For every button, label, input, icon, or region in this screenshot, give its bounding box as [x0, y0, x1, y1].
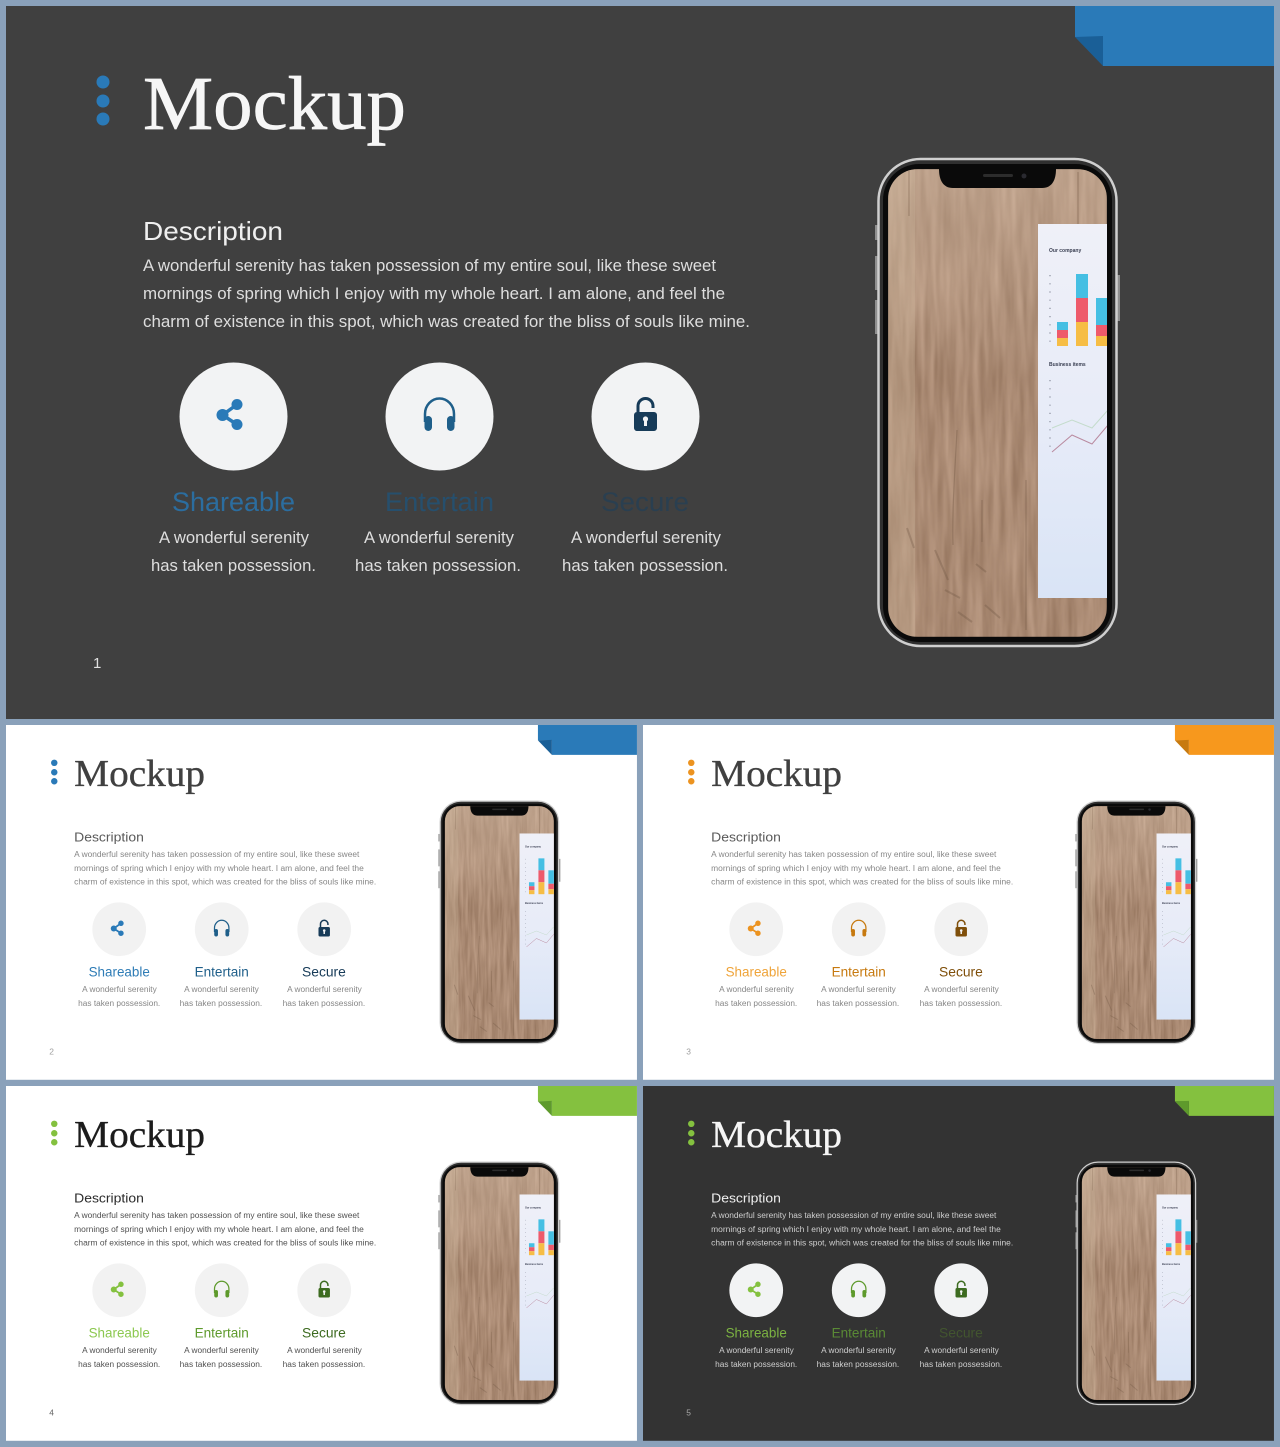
feature: shareable: Shareable [89, 1325, 150, 1340]
feature: entertain: A wonderful serenity [364, 529, 515, 547]
feature: entertain: A wonderful serenity [821, 985, 897, 994]
page number: 2 [49, 1046, 54, 1056]
panel: slide 3 white orange [643, 725, 1274, 1080]
feature: secure: has taken possession. [283, 999, 365, 1008]
feature: entertain: has taken possession. [180, 1360, 262, 1369]
text block: description body: charm of existence in this spot, which was created for the bliss of souls like mine. [143, 313, 750, 331]
feature: secure [920, 1263, 1002, 1369]
feature: secure: Secure [939, 964, 983, 979]
feature: secure: A wonderful serenity [287, 985, 363, 994]
panel: slide 5 dark green [643, 1086, 1274, 1441]
page number: 3 [686, 1046, 691, 1056]
feature: secure: Secure [601, 487, 689, 517]
panel: slide 2 white blue [6, 725, 637, 1080]
feature: secure: A wonderful serenity [924, 1346, 1000, 1355]
feature: shareable [715, 1263, 797, 1369]
feature: entertain [180, 902, 262, 1008]
feature: entertain [817, 902, 899, 1008]
feature: entertain [817, 1263, 899, 1369]
feature: shareable: Shareable [726, 964, 787, 979]
feature: secure: Secure [302, 1325, 346, 1340]
corner ribbon [1075, 6, 1274, 66]
phone mockup [438, 801, 560, 1043]
text block: description body: mornings of spring which I enjoy with my whole heart. I am alone, and feel the [711, 864, 1001, 873]
icon: title dots [51, 760, 58, 784]
feature: shareable [151, 362, 316, 575]
feature: entertain: A wonderful serenity [184, 1346, 260, 1355]
phone mockup [1075, 801, 1197, 1043]
icon: title dots [688, 760, 695, 784]
feature: entertain: Entertain [832, 1325, 886, 1340]
feature: shareable: A wonderful serenity [159, 529, 310, 547]
feature: secure: A wonderful serenity [287, 1346, 363, 1355]
feature: secure: A wonderful serenity [571, 529, 722, 547]
icon: title dots [51, 1121, 58, 1145]
page number: 5 [686, 1407, 691, 1417]
feature: secure: has taken possession. [562, 557, 728, 575]
feature: secure: Secure [939, 1325, 983, 1340]
feature: shareable [78, 1263, 160, 1369]
text block: description body: A wonderful serenity has taken possession of my entire soul, like these sweet [711, 1211, 997, 1220]
text block: description body: mornings of spring which I enjoy with my whole heart. I am alone, and feel the [711, 1225, 1001, 1234]
heading: description: Description [711, 1190, 781, 1205]
slide background [6, 1086, 637, 1441]
text block: description body: A wonderful serenity has taken possession of my entire soul, like these sweet [711, 850, 997, 859]
title: Mockup [74, 753, 205, 795]
feature: shareable: A wonderful serenity [719, 985, 795, 994]
corner ribbon [538, 1086, 637, 1116]
feature: entertain [180, 1263, 262, 1369]
text block: description body: charm of existence in this spot, which was created for the bliss of souls like mine. [74, 1239, 376, 1248]
feature: entertain: has taken possession. [180, 999, 262, 1008]
text block: description body: mornings of spring which I enjoy with my whole heart. I am alone, and feel the [143, 285, 725, 303]
text block: description body: charm of existence in this spot, which was created for the bliss of souls like mine. [711, 1239, 1013, 1248]
heading: description: Description [74, 829, 144, 844]
feature: shareable: A wonderful serenity [82, 985, 158, 994]
feature: entertain: has taken possession. [817, 1360, 899, 1369]
feature: secure [920, 902, 1002, 1008]
slide background [643, 1086, 1274, 1441]
phone mockup [438, 1162, 560, 1404]
text block: description body: mornings of spring which I enjoy with my whole heart. I am alone, and feel the [74, 864, 364, 873]
feature: entertain: Entertain [385, 487, 494, 517]
page number: 4 [49, 1407, 54, 1417]
feature: secure [562, 362, 728, 575]
text block: description body [74, 1211, 376, 1248]
feature: shareable [78, 902, 160, 1008]
feature: secure: has taken possession. [283, 1360, 365, 1369]
title: Mockup [74, 1114, 205, 1156]
feature: shareable: A wonderful serenity [82, 1346, 158, 1355]
feature: entertain: Entertain [832, 964, 886, 979]
feature: entertain: has taken possession. [355, 557, 521, 575]
feature: secure: has taken possession. [920, 999, 1002, 1008]
text block: description body: mornings of spring which I enjoy with my whole heart. I am alone, and feel the [74, 1225, 364, 1234]
feature: shareable: has taken possession. [78, 1360, 160, 1369]
text block: description body: charm of existence in this spot, which was created for the bliss of souls like mine. [711, 878, 1013, 887]
page number: 1 [93, 655, 101, 672]
panel: slide 4 white green [6, 1086, 637, 1441]
text block: description body [143, 257, 750, 331]
icon: title dots [96, 76, 110, 126]
feature: shareable [715, 902, 797, 1008]
corner ribbon [538, 725, 637, 755]
feature: secure [283, 902, 365, 1008]
feature: secure [283, 1263, 365, 1369]
feature: shareable: has taken possession. [715, 1360, 797, 1369]
heading: description: Description [143, 216, 283, 246]
feature: shareable: A wonderful serenity [719, 1346, 795, 1355]
feature: shareable: has taken possession. [715, 999, 797, 1008]
corner ribbon [1175, 1086, 1274, 1116]
text block: description body: charm of existence in this spot, which was created for the bliss of souls like mine. [74, 878, 376, 887]
phone mockup [875, 159, 1120, 646]
slide background [643, 725, 1274, 1080]
feature: shareable: has taken possession. [151, 557, 316, 575]
title: Mockup [711, 1114, 842, 1156]
heading: description: Description [711, 829, 781, 844]
feature: shareable: Shareable [172, 487, 295, 517]
text block: description body [711, 1211, 1013, 1248]
title: Mockup [711, 753, 842, 795]
phone mockup [1075, 1162, 1197, 1404]
feature: entertain: has taken possession. [817, 999, 899, 1008]
corner ribbon [1175, 725, 1274, 755]
slide background [6, 725, 637, 1080]
slide background [6, 6, 1274, 719]
text block: description body [74, 850, 376, 887]
text block: description body: A wonderful serenity has taken possession of my entire soul, like these sweet [74, 850, 360, 859]
icon: title dots [688, 1121, 695, 1145]
text block: description body: A wonderful serenity has taken possession of my entire soul, like these sweet [143, 257, 716, 275]
panel: slide 1 large dark blue [6, 6, 1274, 719]
feature: shareable: Shareable [89, 964, 150, 979]
feature: entertain: A wonderful serenity [184, 985, 260, 994]
title: Mockup [143, 62, 406, 146]
feature: entertain [355, 362, 521, 575]
text block: description body: A wonderful serenity has taken possession of my entire soul, like these sweet [74, 1211, 360, 1220]
feature: entertain: Entertain [195, 964, 249, 979]
feature: entertain: A wonderful serenity [821, 1346, 897, 1355]
feature: secure: has taken possession. [920, 1360, 1002, 1369]
feature: shareable: Shareable [726, 1325, 787, 1340]
feature: secure: Secure [302, 964, 346, 979]
text block: description body [711, 850, 1013, 887]
feature: secure: A wonderful serenity [924, 985, 1000, 994]
feature: shareable: has taken possession. [78, 999, 160, 1008]
heading: description: Description [74, 1190, 144, 1205]
feature: entertain: Entertain [195, 1325, 249, 1340]
